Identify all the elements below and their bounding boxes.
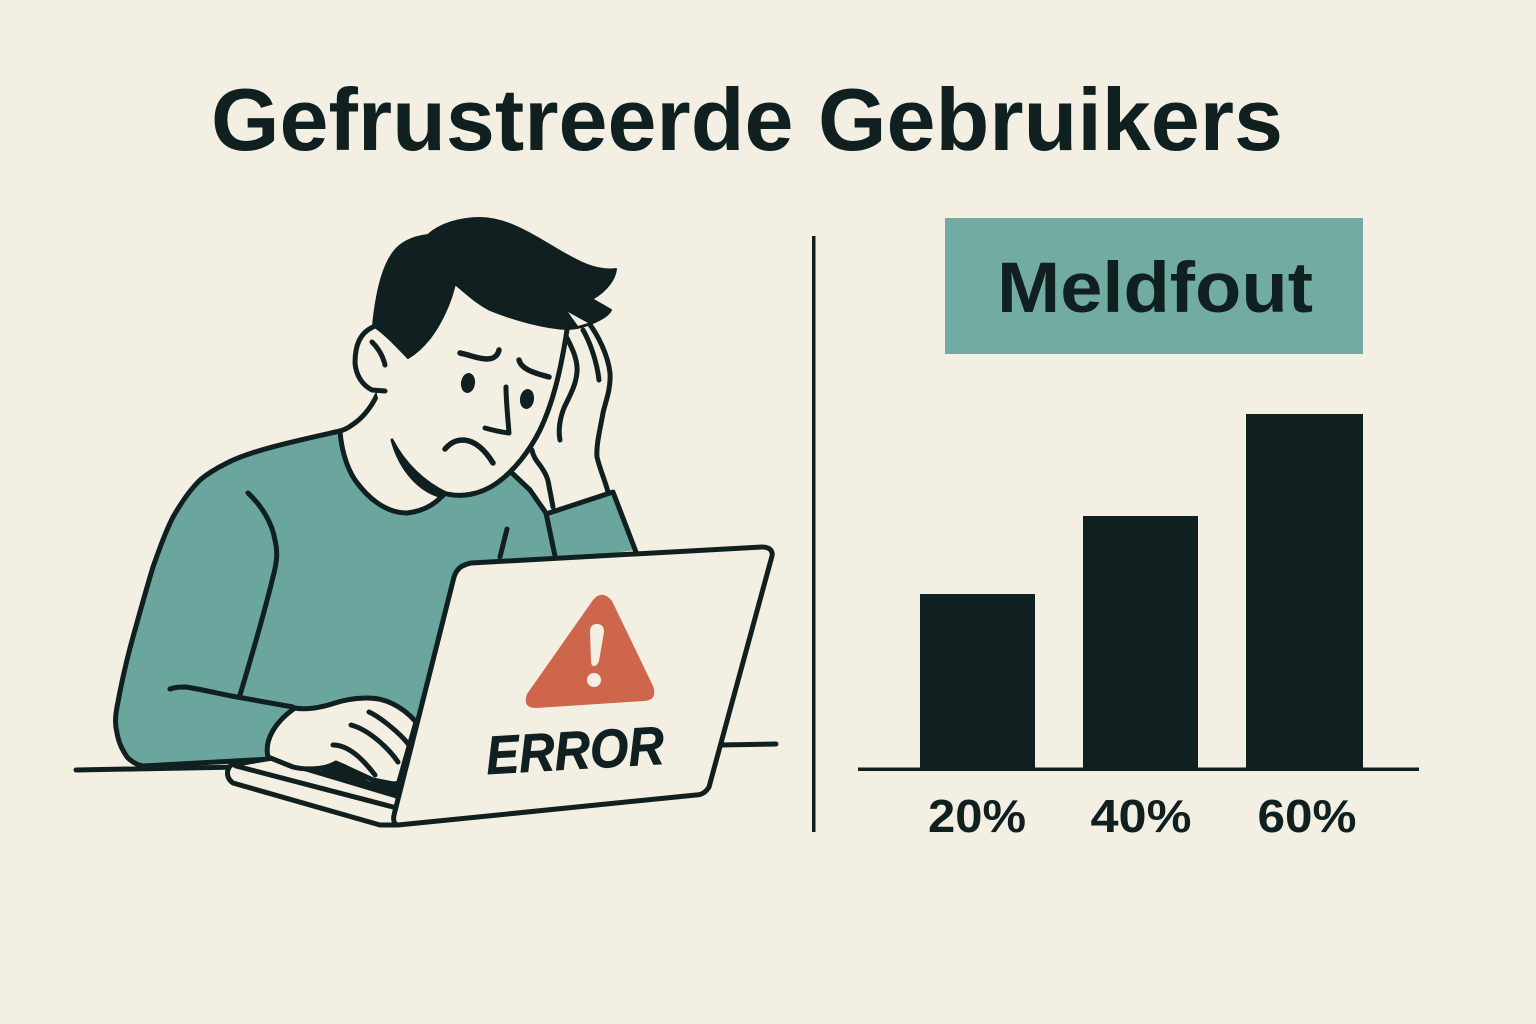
ear: [355, 327, 395, 391]
title: Gefrustreerde Gebruikers: [211, 70, 1283, 169]
hand lines: [512, 322, 610, 556]
hand on head: [532, 312, 610, 513]
right eye: [519, 388, 535, 410]
sweater body: [116, 431, 635, 766]
divider: [812, 236, 816, 832]
typing hand: [267, 698, 416, 785]
hair: [373, 218, 616, 358]
sweater outline: [116, 431, 340, 766]
finger lines: [333, 712, 409, 775]
keyboard lines: [236, 760, 400, 807]
left eye: [460, 372, 476, 394]
eyebrows: [460, 350, 549, 377]
ear lines: [355, 327, 385, 391]
illustration: frustrated user at laptop: [76, 218, 776, 825]
nose: [485, 387, 509, 433]
keys under hand: [320, 763, 400, 797]
desk line: [76, 744, 776, 770]
bar chart: 40%: [1090, 790, 1192, 842]
mouth: [445, 440, 493, 463]
face edge: [443, 330, 567, 495]
icon: warning triangle: [526, 595, 654, 708]
wrist skin: [512, 450, 553, 513]
label box: Meldfout: [945, 218, 1363, 354]
laptop screen: [394, 547, 772, 825]
jaw shadow: [392, 440, 446, 497]
finger tip over hair: [568, 312, 588, 326]
bar chart: 60%: [1258, 790, 1356, 842]
sleeve cuff: [546, 492, 636, 552]
sleeve details: [170, 493, 507, 707]
keyboard: [227, 750, 402, 825]
error label: ERROR: [484, 716, 666, 786]
neck and collar lines: [340, 395, 443, 513]
label box: Meldfout: Meldfout: [997, 249, 1313, 328]
neck and collar: [340, 395, 443, 513]
bar chart: [858, 414, 1419, 842]
bar chart: 20%: [928, 790, 1026, 842]
face: [373, 300, 567, 495]
